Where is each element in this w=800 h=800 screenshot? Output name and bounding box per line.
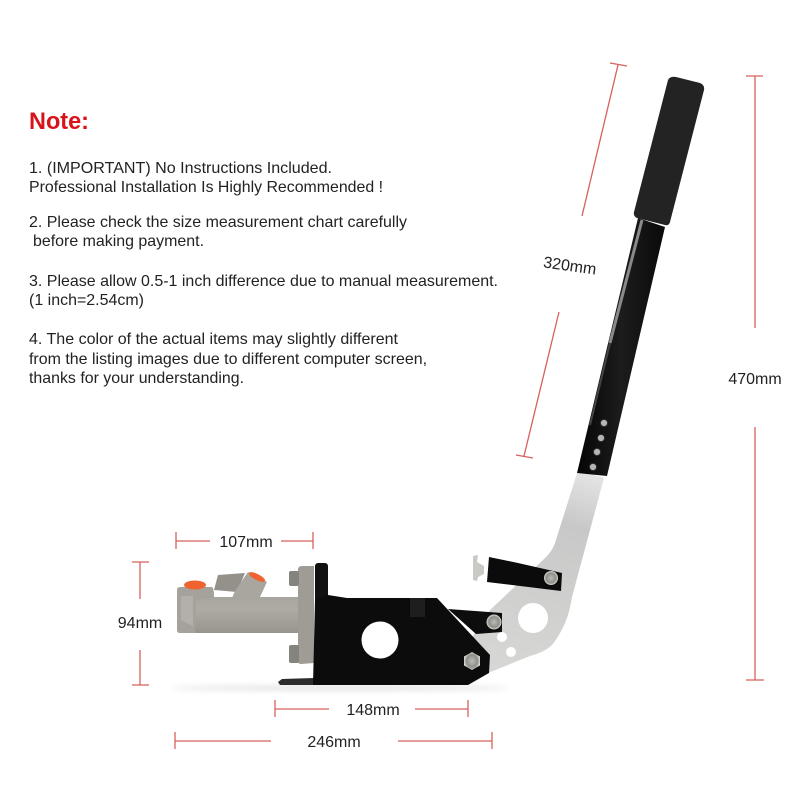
master cylinder (177, 566, 314, 664)
note 2: before making payment. (33, 233, 204, 250)
inlet port (232, 572, 267, 598)
orange cap front (184, 580, 206, 590)
end block (177, 587, 214, 633)
note 3 (29, 273, 498, 309)
dimension: 94mm height (118, 562, 162, 685)
ground shadow (170, 686, 510, 690)
dimension: 148mm bracket length (275, 700, 468, 719)
silver lever plate (470, 470, 604, 673)
notes panel (29, 108, 498, 387)
product illustration: hydraulic handbrake (170, 77, 704, 691)
upper pin arm (473, 555, 562, 591)
note 1: 1. (IMPORTANT) No Instructions Included. (29, 160, 332, 177)
dimension: 107mm cylinder length: 107mm (219, 534, 273, 551)
dimension: 320mm lever length: 320mm (542, 254, 597, 279)
note 4: from the listing images due to different computer screen, (29, 351, 427, 368)
note 2 (29, 214, 407, 250)
note heading: Note: (29, 108, 89, 135)
reservoir (214, 573, 245, 592)
dimension: 320mm lever length (516, 63, 627, 458)
dimension: 94mm height: 94mm (118, 615, 162, 632)
dimension: 246mm base length (175, 732, 492, 751)
lower pin arm (448, 609, 502, 634)
black bracket (278, 563, 490, 685)
foam grip (634, 77, 704, 225)
dimension: 470mm height (728, 76, 782, 680)
note 1: Professional Installation Is Highly Recommended ! (29, 179, 383, 196)
black tube (577, 218, 665, 476)
note 2: 2. Please check the size measurement chart carefully (29, 214, 407, 231)
dimension: 107mm cylinder length (176, 532, 313, 551)
dimension: 148mm bracket length: 148mm (346, 702, 400, 719)
note 4: 4. The color of the actual items may slightly different (29, 331, 399, 348)
cylinder barrel (195, 597, 300, 633)
note 4 (29, 331, 427, 387)
adjustment holes (589, 419, 608, 471)
note 3: 3. Please allow 0.5-1 inch difference due to manual measurement. (29, 273, 498, 290)
mounting flange (298, 566, 314, 664)
dimension: 246mm base length: 246mm (307, 734, 361, 751)
note 3: (1 inch=2.54cm) (29, 292, 144, 309)
dimension: 470mm height: 470mm (728, 371, 782, 388)
note 4: thanks for your understanding. (29, 370, 244, 387)
mounting bolts (289, 571, 299, 586)
orange cap top (248, 570, 266, 584)
note 1 (29, 160, 383, 196)
